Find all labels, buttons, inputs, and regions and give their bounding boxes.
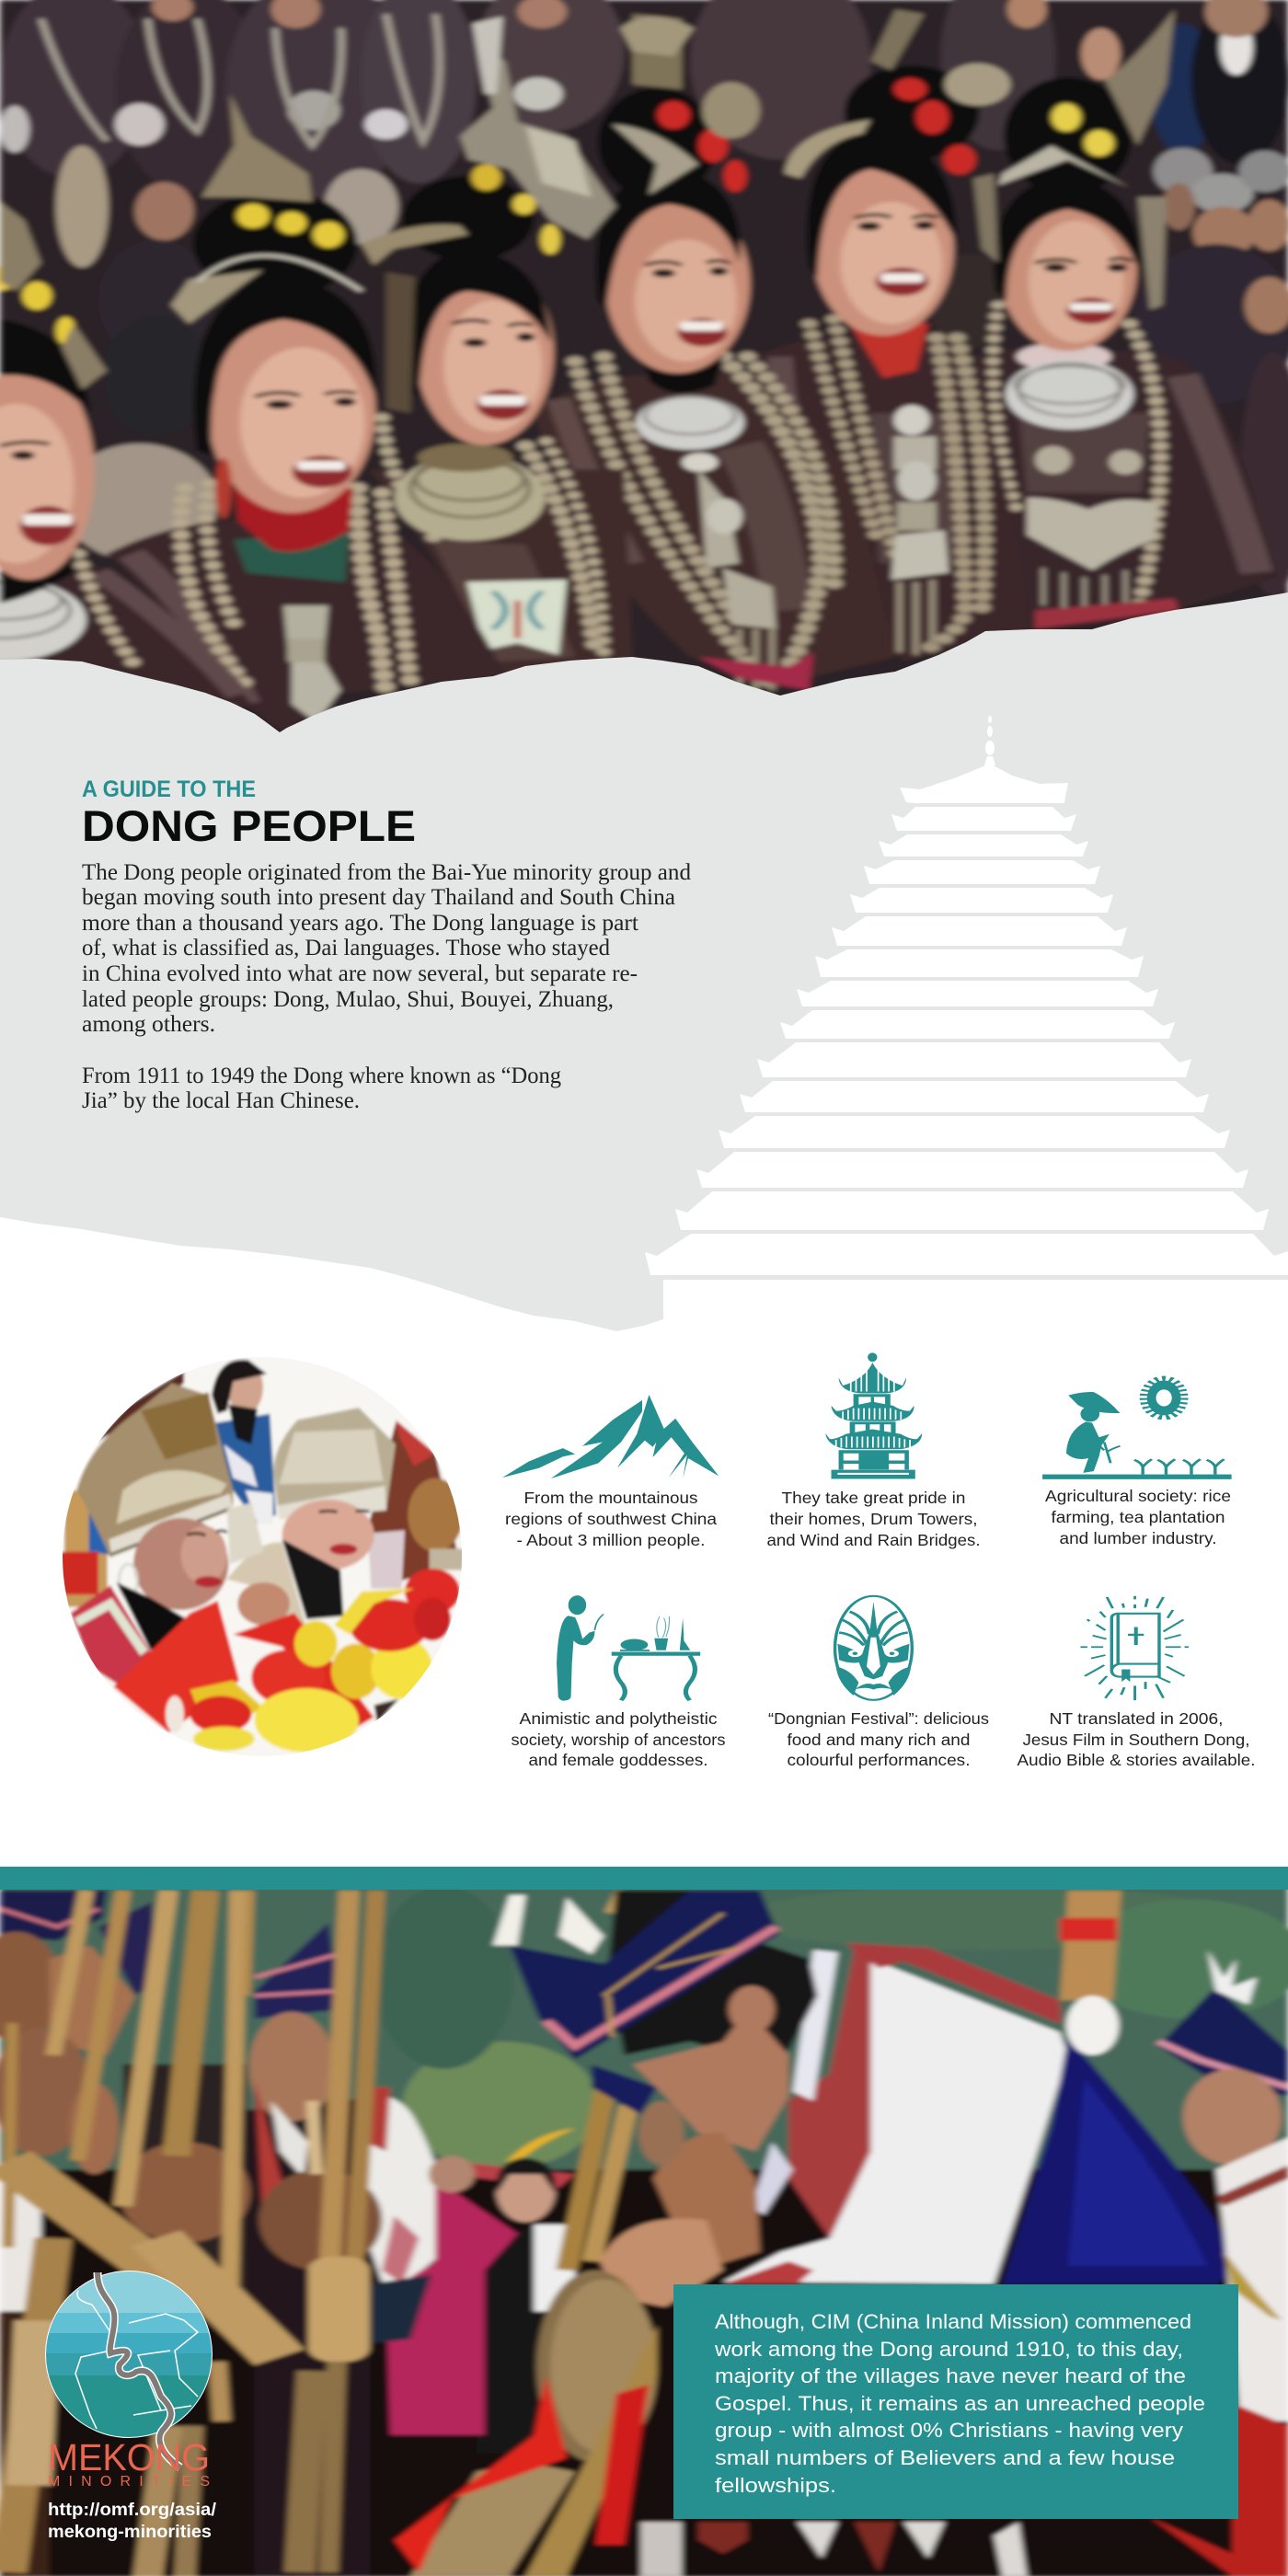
intro text block: more than a thousand years ago. The Dong language is part xyxy=(82,911,638,936)
caption: pagoda xyxy=(767,1489,981,1549)
circular photo: women in silver headdresses with flowers xyxy=(55,1352,469,1757)
caption: worship xyxy=(512,1709,726,1769)
caption: farmer: Agricultural society: rice xyxy=(1045,1487,1231,1505)
callout text: fellowships. xyxy=(715,2474,836,2497)
intro text block xyxy=(82,860,691,1113)
caption: farmer: and lumber industry. xyxy=(1060,1529,1216,1547)
woman 1 xyxy=(0,201,255,708)
icon: farmer and sun xyxy=(1042,1379,1232,1479)
caption: festival: colourful performances. xyxy=(788,1751,970,1769)
callout text xyxy=(714,2310,1205,2497)
logo wordmark: MEKONG xyxy=(48,2436,210,2478)
caption: farmer xyxy=(1045,1487,1231,1547)
website link: http://omf.org/asia/ xyxy=(48,2501,217,2520)
caption: worship: society, worship of ancestors xyxy=(512,1731,726,1749)
heading: a guide to the: A GUIDE TO THE xyxy=(82,776,256,802)
bystanders xyxy=(370,2128,575,2454)
green hillside xyxy=(0,1886,1288,2169)
title: Dong People: DONG PEOPLE xyxy=(82,801,416,850)
drum xyxy=(395,2271,748,2576)
intro text block: lated people groups: Dong, Mulao, Shui, Bouyei, Zhuang, xyxy=(82,987,614,1012)
woman 5 xyxy=(748,9,1031,661)
caption: mountains: regions of southwest China xyxy=(505,1510,717,1528)
callout text: majority of the villages have never heard of the xyxy=(715,2364,1186,2387)
woman 3 xyxy=(362,17,633,678)
caption: festival: food and many rich and xyxy=(788,1731,970,1749)
photo: Dong women in silver jewellery xyxy=(0,0,1288,736)
callout text: small numbers of Believers and a few house xyxy=(715,2446,1175,2469)
white drum tower silhouette xyxy=(645,716,1288,1275)
centre-left player xyxy=(119,1923,452,2576)
caption: mountains xyxy=(505,1489,717,1549)
callout text: work among the Dong around 1910, to this day, xyxy=(714,2338,1183,2361)
icon: radiant Bible xyxy=(1080,1596,1189,1700)
icon: worship at ancestral altar xyxy=(557,1595,700,1701)
caption: Bible xyxy=(1018,1709,1255,1769)
caption: pagoda: their homes, Drum Towers, xyxy=(769,1510,977,1528)
teal divider bar xyxy=(0,1867,1288,1890)
caption: Bible: Jesus Film in Southern Dong, xyxy=(1023,1731,1249,1749)
photo: lusheng players xyxy=(0,1886,1288,2576)
callout text: group - with almost 0% Christians - having very xyxy=(715,2419,1183,2442)
caption: Bible: NT translated in 2006, xyxy=(1049,1709,1224,1728)
woman 4 xyxy=(534,14,895,690)
icon: opera mask xyxy=(835,1596,912,1700)
caption: pagoda: They take great pride in xyxy=(782,1489,966,1507)
caption: mountains: - About 3 million people. xyxy=(517,1531,705,1549)
logo sub-wordmark: MINORITIES xyxy=(48,2474,210,2490)
caption: worship: and female goddesses. xyxy=(528,1751,708,1769)
crowd background xyxy=(0,0,1288,596)
intro text block: began moving south into present day Thailand and South China xyxy=(82,885,675,910)
woman 6 xyxy=(957,9,1277,629)
intro text block: From 1911 to 1949 the Dong where known as “Dong xyxy=(82,1064,561,1088)
website link xyxy=(48,2501,217,2542)
main player xyxy=(493,1891,1240,2306)
caption: farmer: farming, tea plantation xyxy=(1051,1508,1225,1526)
caption: pagoda: and Wind and Rain Bridges. xyxy=(767,1531,981,1549)
logo: Mekong Minorities xyxy=(45,2271,217,2542)
intro text block: of, what is classified as, Dai languages. Those who stayed xyxy=(82,936,610,960)
caption: worship: Animistic and polytheistic xyxy=(519,1709,718,1728)
left player xyxy=(0,1891,156,2576)
torn grey background panel xyxy=(0,592,1288,1331)
website link: mekong-minorities xyxy=(48,2523,212,2542)
caption: mountains: From the mountainous xyxy=(524,1489,698,1507)
callout text: Gospel. Thus, it remains as an unreached people xyxy=(715,2392,1205,2415)
caption: festival: “Dongnian Festival”: delicious xyxy=(768,1709,989,1728)
intro text block: Jia” by the local Han Chinese. xyxy=(82,1088,360,1113)
logo globe xyxy=(45,2271,213,2467)
woman 2 xyxy=(107,94,505,732)
intro text block: in China evolved into what are now several, but separate re- xyxy=(82,961,638,986)
icon: mountain xyxy=(502,1395,719,1478)
bamboo pipes xyxy=(8,1891,628,2576)
right player xyxy=(797,1891,1288,2576)
icon: pagoda xyxy=(825,1352,922,1479)
callout text: Although, CIM (China Inland Mission) commenced xyxy=(715,2310,1191,2333)
panel: unreached callout xyxy=(673,2284,1238,2519)
pipe mouth xyxy=(308,2257,370,2362)
intro text block: The Dong people originated from the Bai-Yue minority group and xyxy=(82,860,691,885)
intro text block: among others. xyxy=(82,1012,215,1037)
caption: festival xyxy=(768,1709,989,1769)
caption: Bible: Audio Bible & stories available. xyxy=(1018,1751,1255,1769)
